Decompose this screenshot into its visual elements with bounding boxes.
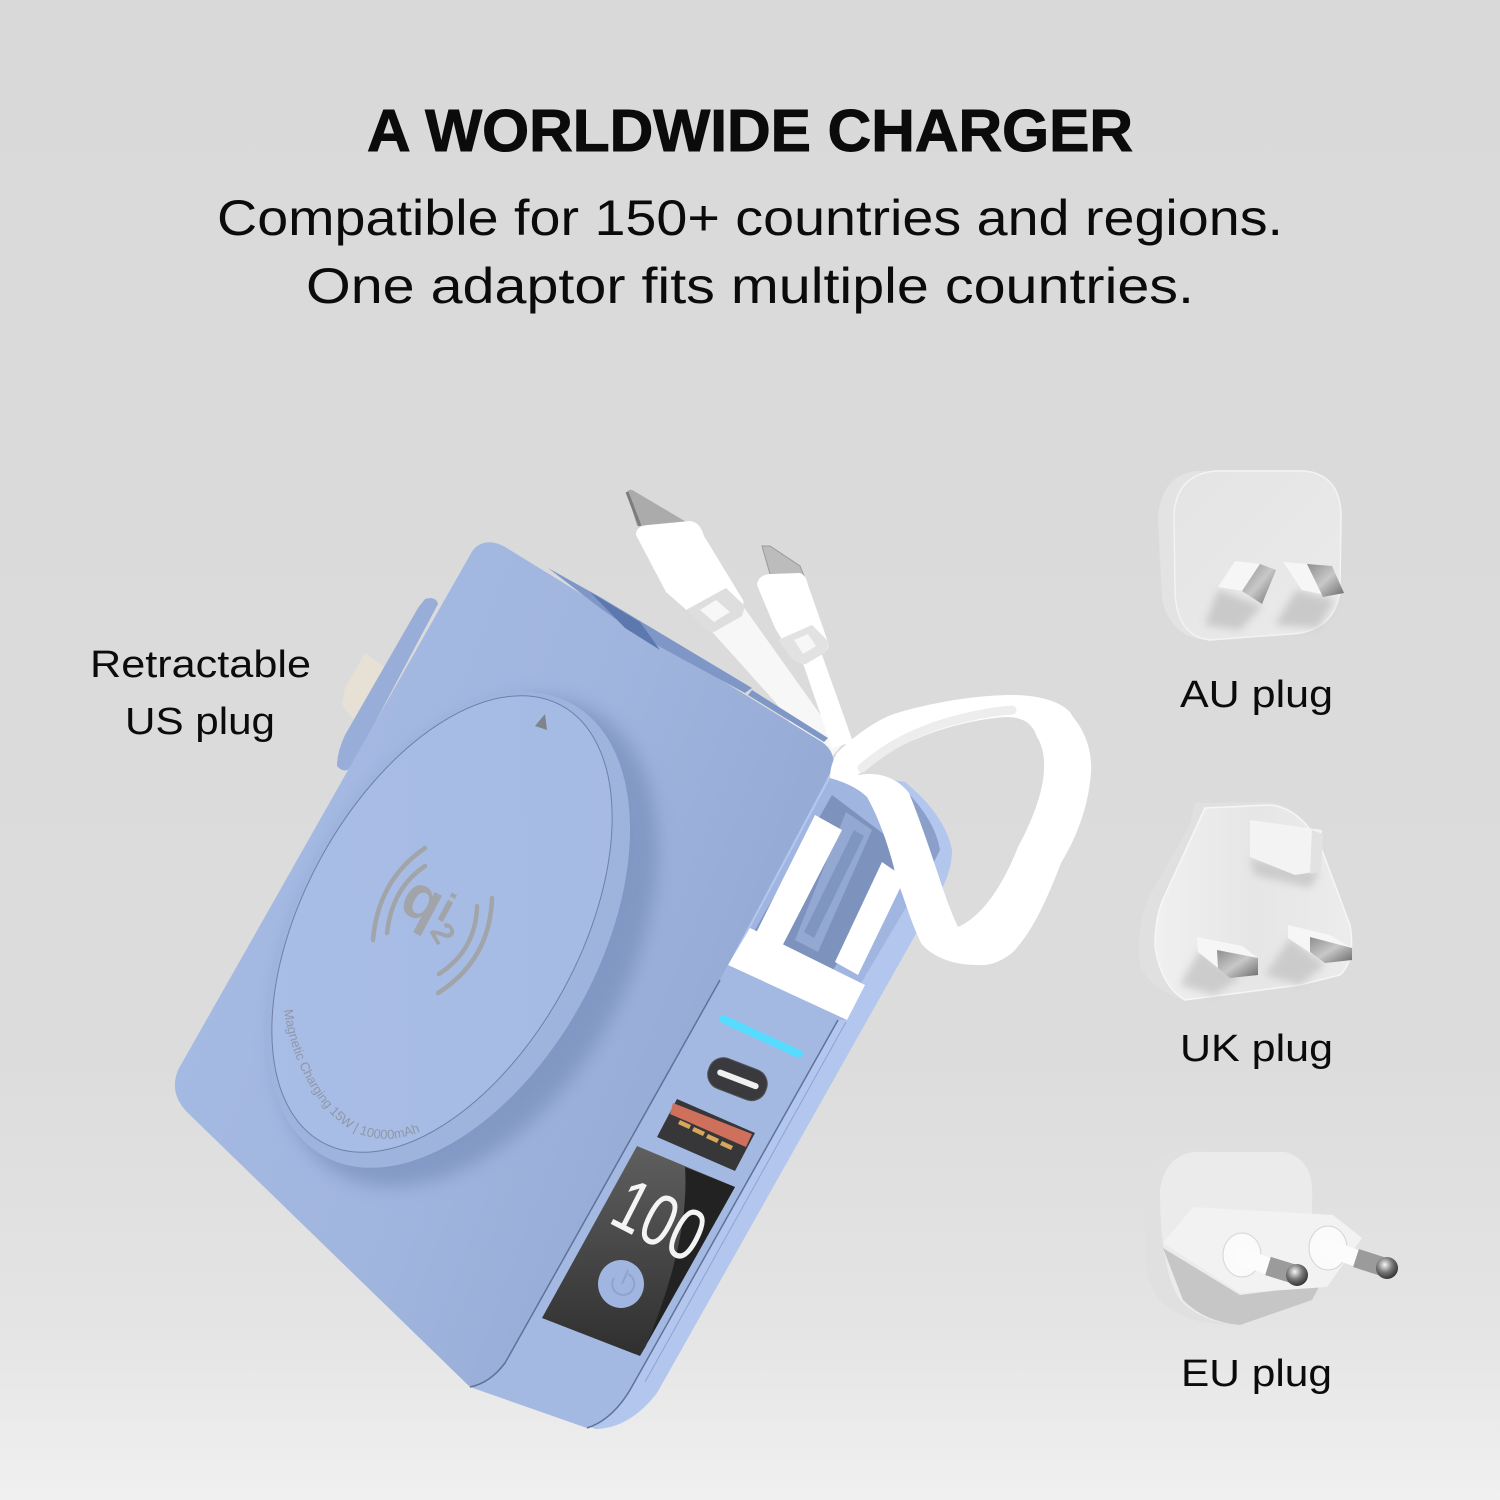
qi2 logo	[373, 848, 492, 993]
UK plug pin shadows	[1180, 858, 1325, 995]
power button	[598, 1260, 644, 1308]
AU plug prong shadows	[1205, 590, 1335, 630]
white cable straps in recess	[750, 815, 905, 975]
label: retractable US plug	[90, 644, 311, 743]
Lightning retractable cable strap	[794, 637, 853, 748]
EU plug	[1143, 1150, 1398, 1325]
subtitle	[217, 190, 1283, 314]
LED indicator	[723, 1019, 799, 1054]
top slot	[548, 568, 752, 693]
qi2 logo: q	[390, 860, 456, 939]
disc caption: Magnetic Charging 15W | 10000mAh	[284, 1010, 420, 1139]
EU plug back plate	[1143, 1150, 1312, 1325]
retractable US plug prong and base	[337, 598, 438, 770]
label: AU plug: AU plug	[1180, 674, 1333, 716]
EU plug pins	[1223, 1233, 1261, 1277]
label: retractable US plug: US plug	[125, 701, 275, 743]
battery percentage readout: 100	[600, 1162, 719, 1278]
label: retractable US plug: Retractable	[90, 644, 311, 686]
front face	[175, 542, 834, 1387]
USB-C port	[703, 1053, 772, 1105]
power bank illustration	[174, 490, 1092, 1429]
magnetic disc	[271, 692, 662, 1192]
white retaining bar	[728, 928, 865, 1020]
UK plug	[1139, 802, 1352, 1000]
AU plug body	[1158, 471, 1341, 640]
Lightning connector	[757, 546, 829, 664]
title: A WORLDWIDE CHARGER	[367, 98, 1133, 164]
body side silhouette	[470, 770, 952, 1429]
qi2 logo: 2	[423, 916, 463, 950]
subtitle: One adaptor fits multiple countries.	[306, 258, 1194, 314]
subtitle: Compatible for 150+ countries and regions.	[217, 190, 1283, 246]
UK plug body	[1139, 802, 1352, 1000]
label: UK plug: UK plug	[1180, 1028, 1333, 1070]
AU plug	[1158, 471, 1344, 640]
disc alignment triangle	[535, 714, 547, 730]
label: EU plug: EU plug	[1181, 1353, 1332, 1395]
USB-C connector	[627, 490, 745, 632]
USB-C retractable cable strap	[697, 606, 842, 768]
UK plug top pin	[1250, 820, 1322, 875]
side port panel	[470, 965, 847, 1428]
white looped cable ribbon	[830, 695, 1091, 965]
EU plug nose	[1163, 1207, 1362, 1293]
cable recess	[750, 775, 940, 985]
AU plug prongs	[1218, 561, 1260, 591]
USB-A port	[657, 1099, 755, 1171]
qi2 logo: i	[431, 884, 463, 931]
UK plug bottom pins	[1197, 937, 1258, 968]
LED display	[542, 1146, 735, 1356]
